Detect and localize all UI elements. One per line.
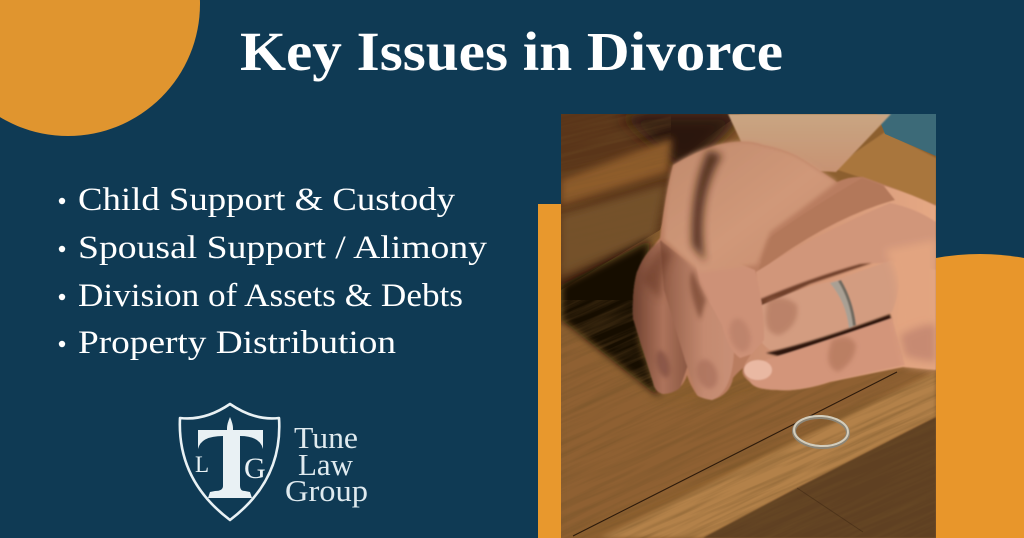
upper hand: fingers [633,240,764,400]
icon: shield with LTG monogram: G [244,452,266,485]
icon: shield with LTG monogram [180,404,279,520]
logo: Tune Law Group [180,404,368,520]
photo: hands and wedding ring on wooden table [561,114,936,538]
wooden table [561,114,936,538]
bullet item: child support: Child Support & Custody [78,182,456,218]
logo wordmark: Tune [294,420,358,455]
logo wordmark: Group [285,473,368,508]
decorative circle: top left [0,0,200,136]
decorative shape: bottom right orange block [936,254,1024,538]
forearm [728,114,891,172]
wedding ring on finger [830,280,856,328]
decorative bar: left of photo [538,204,561,538]
bullet item: property distribution: Property Distribution [78,325,396,361]
title: Key Issues in Divorce [240,21,783,82]
hand silhouette base [633,142,936,400]
upper hand: back [664,142,837,272]
icon: shield with LTG monogram: L [195,452,209,477]
logo wordmark: Law [298,447,354,482]
loose ring on table [793,415,849,448]
bullet item: spousal support: Spousal Support / Alimony [78,230,488,266]
lower hand: back and thumb [744,178,936,390]
hands [633,114,936,400]
logo wordmark [285,420,368,508]
upper hand: shadow fold [692,150,722,262]
bullet list: key issues [59,182,488,361]
bullet item: division of assets: Division of Assets & Debts [78,278,463,314]
